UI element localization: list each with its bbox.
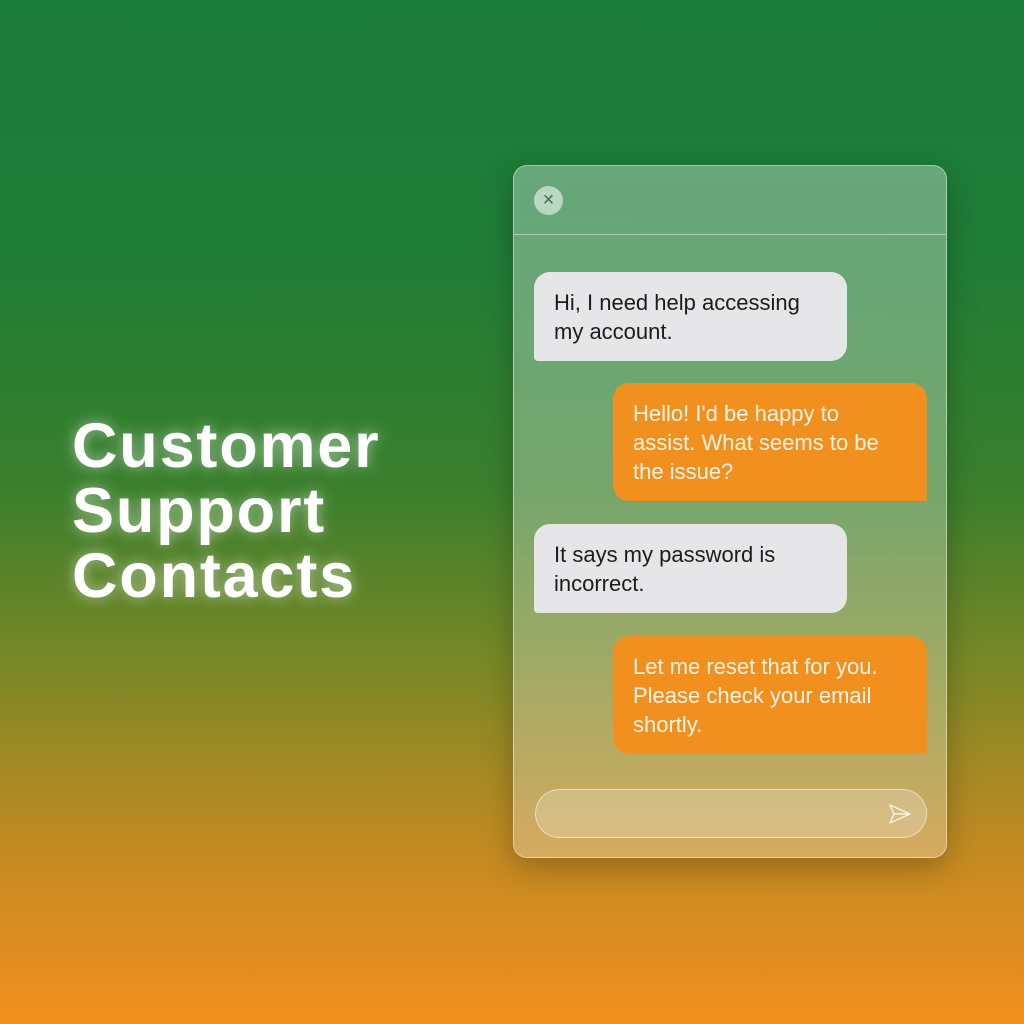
- icon: close button: [534, 186, 563, 215]
- panel: chat window: [513, 165, 947, 858]
- icon: close button: ×: [543, 189, 554, 211]
- title: [66, 411, 384, 611]
- message: agent 1: [613, 383, 927, 501]
- message: agent 1: Hello! I'd be happy to assist. What seems to be the issue?: [633, 401, 879, 484]
- title: Customer: [72, 411, 380, 481]
- title: Contacts: [72, 541, 356, 611]
- title: Support: [72, 476, 326, 546]
- message: agent 2: [613, 636, 927, 754]
- message: user 2: [534, 524, 847, 613]
- message: agent 2: Let me reset that for you. Please check your email shortly.: [633, 654, 878, 737]
- message: user 1: [534, 272, 847, 361]
- input field: [535, 789, 927, 838]
- icon: send: [889, 804, 911, 824]
- message: user 1: Hi, I need help accessing my account.: [554, 290, 800, 344]
- message: user 2: It says my password is incorrect.: [554, 542, 775, 596]
